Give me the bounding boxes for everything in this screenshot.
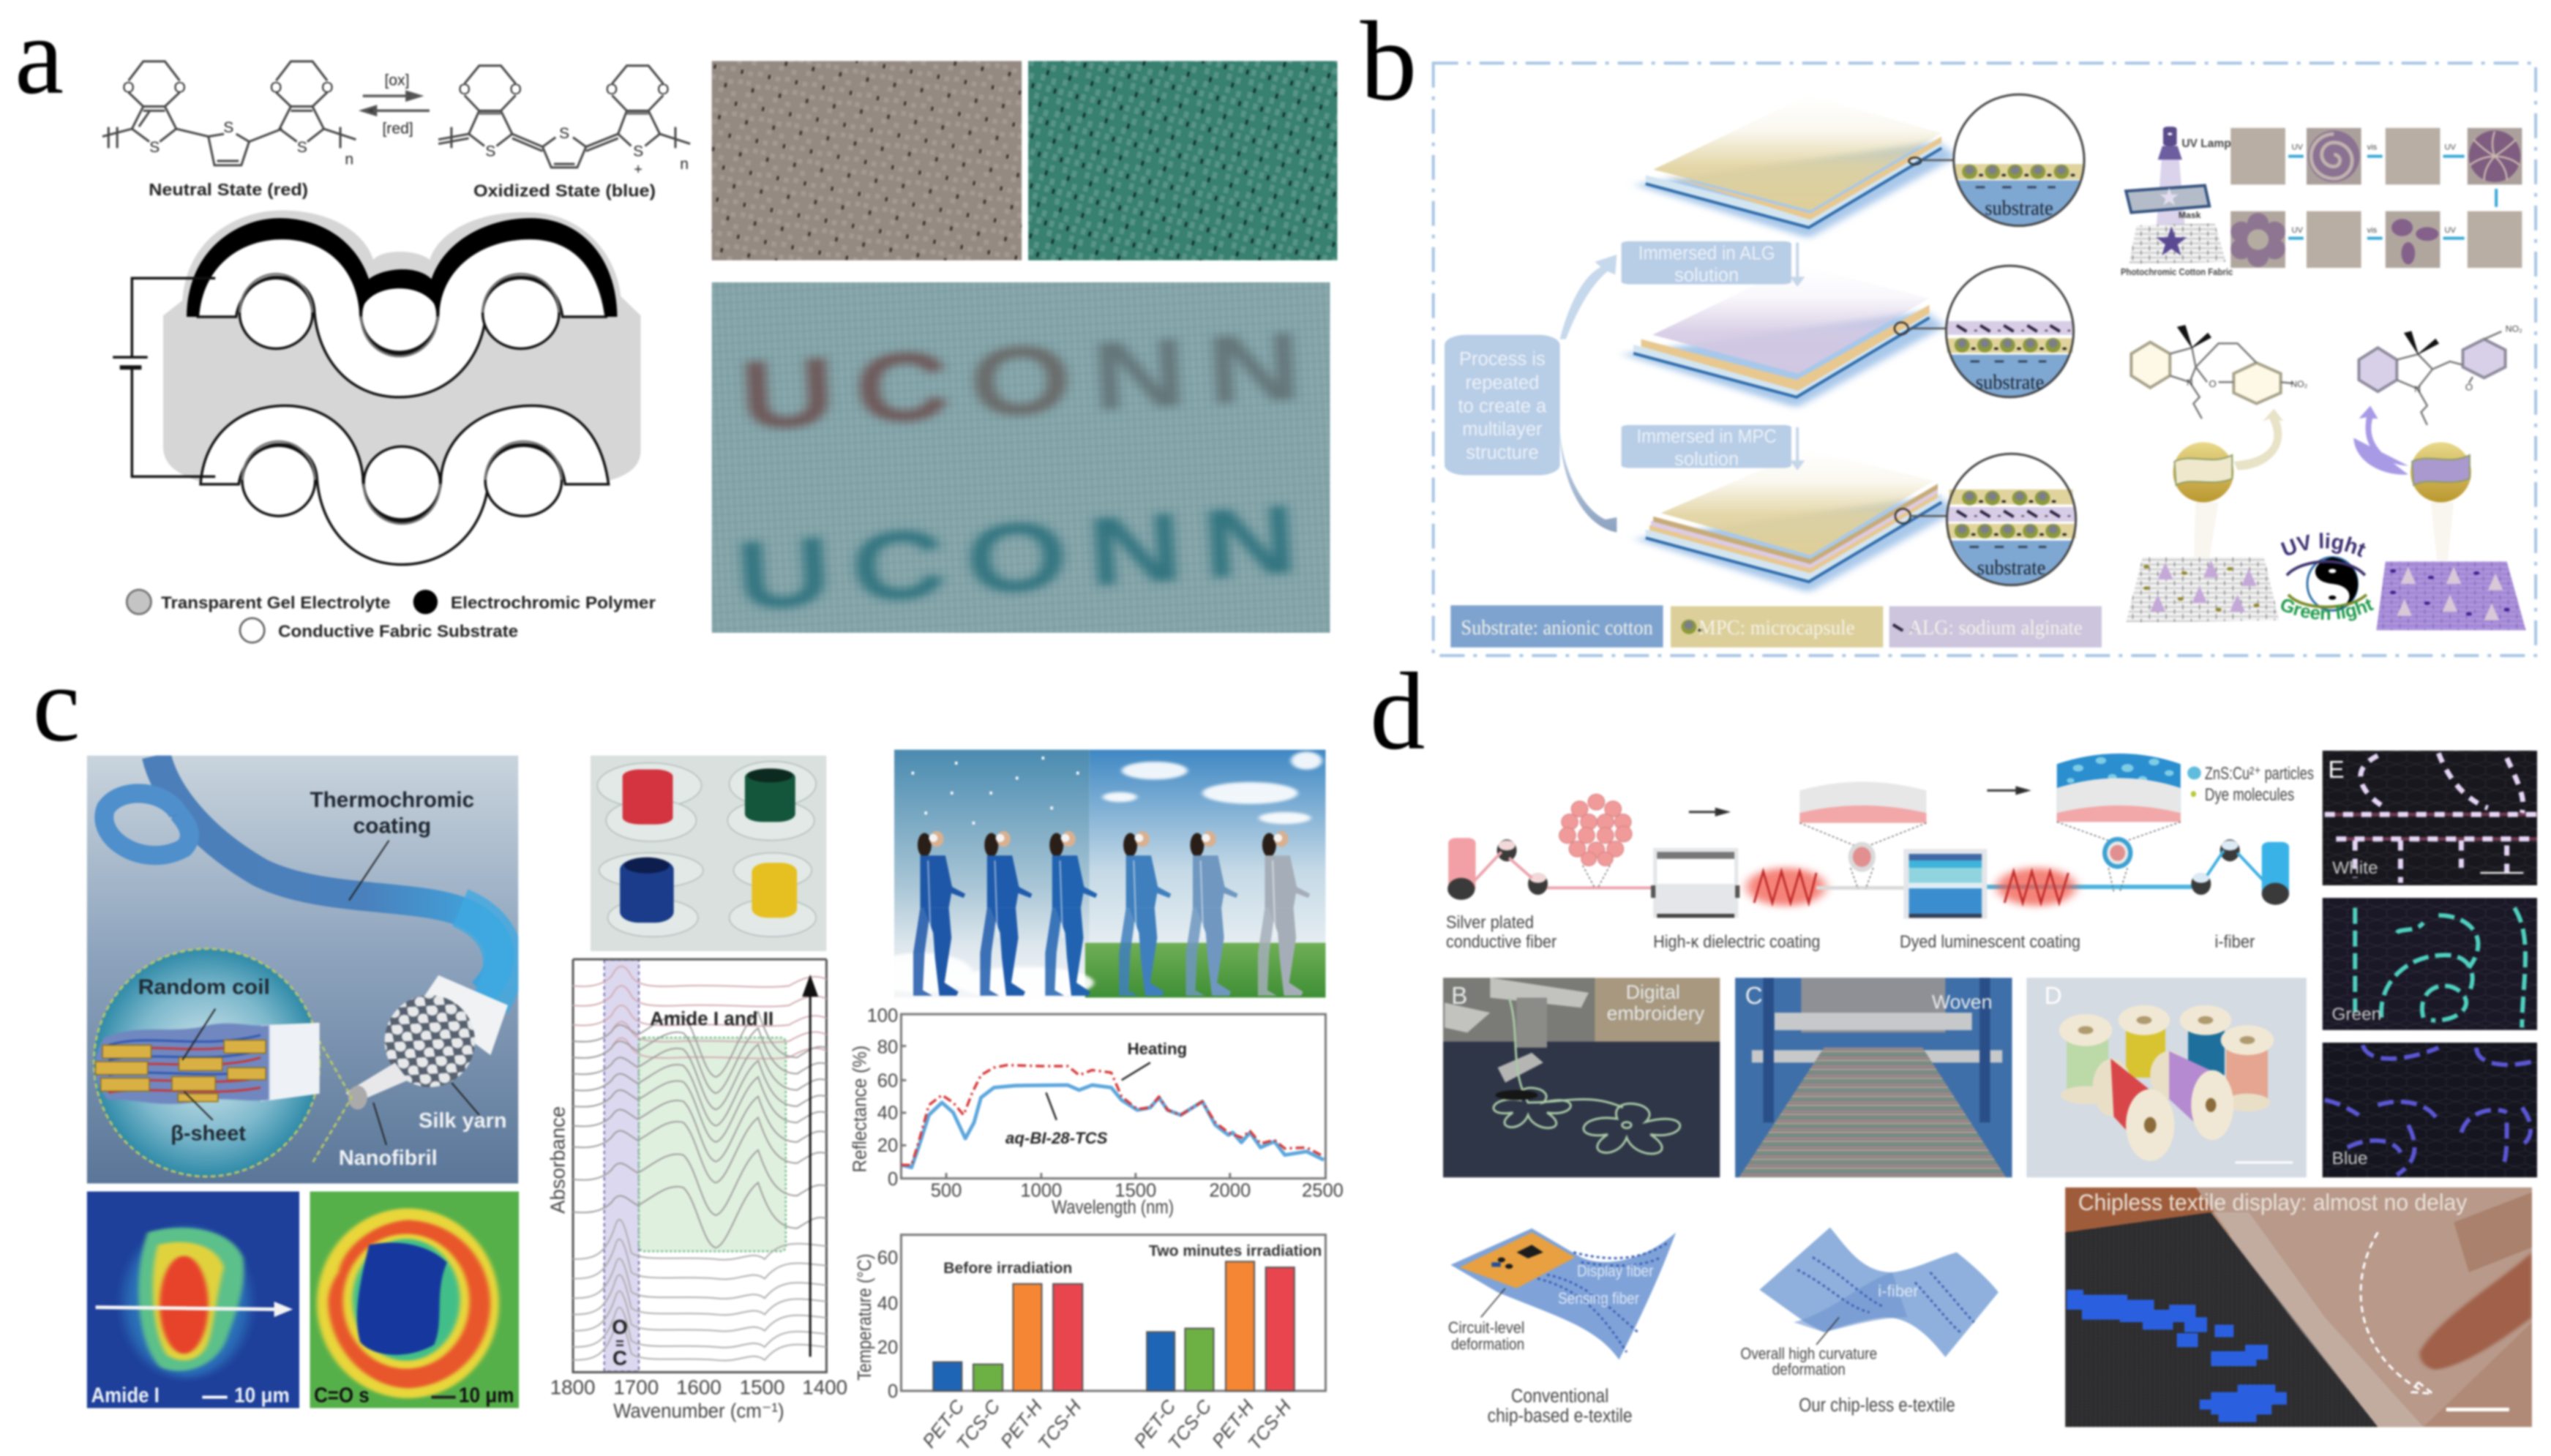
embedded fibers xyxy=(1532,1242,1668,1352)
state label oxidized: Oxidized State (blue) xyxy=(473,181,656,200)
process arrow 2 xyxy=(1987,787,2027,794)
gel electrolyte xyxy=(163,211,640,484)
capsule spheres and arrows xyxy=(2173,405,2471,560)
chemical structures of neutral and oxidized polymer: O xyxy=(173,80,186,97)
panel b: photochromic cotton fabric xyxy=(1358,0,2538,658)
photo labels: Blue xyxy=(2332,1149,2367,1168)
sample and molecule labels: N xyxy=(2414,384,2421,394)
sample and molecule labels: NO₂ xyxy=(2290,379,2308,389)
reflectance labels: 1000 xyxy=(1020,1180,1062,1201)
spectra traces xyxy=(573,967,826,1361)
chemical structures of neutral and oxidized polymer: n xyxy=(345,151,353,168)
reflectance labels: 100 xyxy=(867,1005,898,1026)
photo labels: E xyxy=(2328,757,2345,784)
FTIR spectra chart xyxy=(546,959,847,1422)
panel letter d: d xyxy=(1370,650,1426,773)
e-textile labels: chip-based e-textile xyxy=(1488,1406,1633,1426)
i-fiber labels: Silver plated xyxy=(1446,912,1534,932)
bar chart labels: TCS-H xyxy=(1244,1396,1296,1454)
reflectance line chart xyxy=(850,1005,1344,1218)
white sheath xyxy=(408,975,508,1055)
beta sheet blocks xyxy=(96,1040,266,1102)
chemical structures of neutral and oxidized polymer: O xyxy=(606,81,618,98)
chemical structures of neutral and oxidized polymer: O xyxy=(321,80,334,97)
process step boxes xyxy=(1445,241,1791,476)
dielectric coating tank xyxy=(1651,848,1739,917)
lens pointer lines xyxy=(312,1032,352,1163)
sample and molecule labels: UV xyxy=(2291,143,2303,152)
bar chart labels: 40 xyxy=(877,1294,898,1314)
bar chart labels xyxy=(855,1243,1322,1454)
repeat process label: structure xyxy=(1466,443,1539,463)
blue fabric sheet xyxy=(1450,1228,1676,1359)
sample and molecule labels: O xyxy=(2465,382,2473,393)
annotation arrows xyxy=(1046,1062,1150,1120)
merocyanine molecule open xyxy=(2359,331,2506,425)
FTIR labels: 1600 xyxy=(676,1376,722,1399)
coated fibre xyxy=(157,756,500,993)
bar chart labels: PET-H xyxy=(997,1396,1046,1452)
FTIR labels: Wavenumber (cm⁻¹) xyxy=(613,1400,784,1422)
panel letter b: b xyxy=(1360,0,1417,124)
map labels: 10 μm xyxy=(234,1384,290,1408)
bars after irradiation xyxy=(1147,1261,1295,1391)
step labels: Immersed in ALG xyxy=(1638,244,1775,264)
reversible light icon xyxy=(2287,558,2367,610)
bar chart labels: 0 xyxy=(888,1381,898,1402)
bar chart labels: PET-C xyxy=(919,1396,969,1452)
photo E: white emission xyxy=(2321,749,2539,887)
i-fiber labels: i-fiber xyxy=(2214,932,2255,952)
sample and molecule labels: vis xyxy=(2367,143,2378,152)
redox equilibrium arrows: [red] xyxy=(382,120,413,137)
red reflectance curve xyxy=(901,1065,1324,1165)
repeat process label xyxy=(1458,349,1547,463)
FTIR labels xyxy=(546,1009,847,1422)
fiber dashes xyxy=(1797,1257,1974,1332)
step arrows xyxy=(1793,243,1802,468)
blue wavy sheet xyxy=(1759,1228,1999,1357)
reflectance labels: Reflectance (%) xyxy=(850,1046,870,1172)
chip-less e-textile illustration xyxy=(1759,1228,1999,1357)
photo: coloured yarn spools xyxy=(590,755,827,952)
reflectance labels: Heating xyxy=(1128,1040,1187,1058)
photo B: digital embroidery xyxy=(1442,976,1721,1179)
chart frame and ticks xyxy=(901,1014,1325,1179)
chemical structures of neutral and oxidized polymer: n xyxy=(680,156,689,173)
legend xyxy=(127,590,656,642)
IR map: C=O stretching xyxy=(309,1190,520,1409)
reflectance labels: 0 xyxy=(888,1169,898,1190)
reflectance labels: 80 xyxy=(877,1037,898,1058)
chemical structures of neutral and oxidized polymer: O xyxy=(122,80,135,97)
bar chart labels: TCS-C xyxy=(1164,1396,1216,1454)
map labels: 10 μm xyxy=(459,1384,514,1408)
sample and molecule labels: UV xyxy=(2444,143,2456,152)
pink fibre path xyxy=(1475,852,1653,888)
silk yarn illustration xyxy=(86,754,520,1185)
leader line xyxy=(1481,1288,1505,1317)
sample and molecule labels: Photochromic Cotton Fabric xyxy=(2121,266,2233,277)
chemical structures of neutral and oxidized polymer: S xyxy=(485,143,495,160)
map labels: Amide I xyxy=(91,1384,160,1408)
protein strands xyxy=(95,1024,269,1104)
step labels xyxy=(1637,244,1777,470)
e-textile labels: Circuit-level xyxy=(1448,1318,1524,1337)
embroidered flowers xyxy=(1494,1088,1680,1154)
i-fiber labels: Dyed luminescent coating xyxy=(1900,932,2080,952)
chart frame xyxy=(573,959,826,1372)
reflectance labels: 20 xyxy=(877,1136,898,1156)
bar chart labels: TCS-H xyxy=(1034,1396,1086,1454)
photo: UCONN fabric display: UCONN xyxy=(737,310,1325,451)
bar chart labels: Before irradiation xyxy=(943,1260,1072,1277)
bar chart labels: PET-H xyxy=(1208,1396,1259,1452)
chemical structures of neutral and oxidized polymer: + xyxy=(634,162,643,178)
bar chart labels: 20 xyxy=(877,1337,898,1358)
progression arrow xyxy=(803,977,817,1356)
photo: red state fabric xyxy=(712,61,1022,260)
substrate labels xyxy=(1976,196,2053,579)
reflectance labels: 60 xyxy=(877,1070,898,1091)
repeat process label: repeated xyxy=(1465,372,1539,393)
photo: blue state fabric xyxy=(1028,61,1337,260)
reflectance labels: Wavelength (nm) xyxy=(1052,1198,1174,1218)
yarn labels: β-sheet xyxy=(171,1122,246,1146)
take-up spool xyxy=(2191,839,2289,905)
FTIR labels: = xyxy=(615,1336,624,1352)
yarn labels: coating xyxy=(353,814,431,838)
blue reflectance curve xyxy=(901,1085,1324,1168)
runners xyxy=(913,831,1310,996)
panel c: thermochromic textiles xyxy=(32,645,1344,1454)
photo: UCONN fabric display: UCONN xyxy=(733,483,1321,631)
photo samples xyxy=(2230,128,2522,268)
material legend markers xyxy=(2187,767,2201,797)
bottom fabric band xyxy=(201,405,609,565)
photo D: i-fiber spools xyxy=(2026,977,2307,1178)
yarn labels: Thermochromic xyxy=(310,788,474,812)
chemical structures of neutral and oxidized polymer: S xyxy=(559,125,569,142)
repeat process label: to create a xyxy=(1458,397,1547,417)
chemical structures of neutral and oxidized polymer: O xyxy=(657,81,670,98)
temperature bar chart xyxy=(855,1235,1325,1454)
swipe path xyxy=(2361,1232,2432,1394)
top fabric band xyxy=(198,239,606,397)
FTIR labels: 1400 xyxy=(802,1376,847,1399)
FTIR labels: 1800 xyxy=(550,1376,595,1399)
redox equilibrium arrows: [ox] xyxy=(384,72,409,89)
leader lines xyxy=(182,841,479,1145)
bar chart labels: 60 xyxy=(877,1248,898,1269)
panel d: electroluminescent textile display xyxy=(1370,650,2537,1427)
sample and molecule labels: vis xyxy=(2367,226,2378,235)
curved loop arrows xyxy=(1560,255,1617,533)
FTIR labels: Amide I and II xyxy=(650,1009,773,1029)
process arrow 1 xyxy=(1689,809,1727,815)
legend: Conductive Fabric Substrate xyxy=(278,621,518,640)
sample and molecule labels xyxy=(2121,138,2522,394)
stars on mask and fabric xyxy=(2156,188,2187,255)
reflectance labels: 2500 xyxy=(1302,1180,1344,1201)
sample and molecule labels: UV xyxy=(2291,226,2303,235)
circuit board xyxy=(1460,1232,1575,1288)
sample and molecule labels: Mask xyxy=(2179,210,2201,220)
bar chart frame xyxy=(901,1235,1325,1391)
photo: joggers changing colour xyxy=(893,748,1327,999)
cylinder end xyxy=(261,1023,320,1102)
chemical structures of neutral and oxidized polymer: S xyxy=(297,139,307,156)
chemical structures of neutral and oxidized polymer: O xyxy=(459,81,471,98)
photo labels: White xyxy=(2332,858,2378,878)
sheet 1: MPC layer xyxy=(1634,95,1957,239)
map labels xyxy=(91,1384,514,1408)
reflectance labels: 2000 xyxy=(1209,1180,1251,1201)
magnifier 2 xyxy=(1946,266,2074,398)
chemical structures of neutral and oxidized polymer: S xyxy=(223,119,233,136)
step labels: Immersed in MPC xyxy=(1637,427,1777,447)
substrate labels: substrate xyxy=(1985,196,2053,219)
reflectance labels: 40 xyxy=(877,1103,898,1124)
legend labels: MPC: microcapsule xyxy=(1698,616,1854,639)
FTIR labels: C xyxy=(613,1346,627,1369)
legend: Transparent Gel Electrolyte xyxy=(161,593,391,612)
legend labels: Substrate: anionic cotton xyxy=(1461,616,1653,639)
photochromic patterning: lamp, mask, fabric xyxy=(2126,127,2226,264)
e-textile labels: deformation xyxy=(1772,1360,1846,1378)
layer by layer schematic xyxy=(1445,94,2526,648)
coloured fabric xyxy=(2376,561,2526,630)
repeat process label: Process is xyxy=(1459,349,1546,369)
chemical structures of neutral and oxidized polymer: S xyxy=(149,139,160,156)
yarn labels xyxy=(138,788,507,1170)
sample and molecule labels: N xyxy=(2187,378,2193,388)
curing coil 1 xyxy=(1747,868,1826,906)
FTIR labels: 1500 xyxy=(740,1376,784,1399)
photo labels: embroidery xyxy=(1607,1002,1705,1024)
FTIR labels: 1700 xyxy=(613,1376,659,1399)
state labels: Neutral State (red) xyxy=(149,180,308,199)
photo labels: Woven xyxy=(1932,991,1992,1013)
photo E: blue emission xyxy=(2321,1041,2539,1179)
step labels: solution xyxy=(1674,266,1739,286)
reflectance labels: 500 xyxy=(931,1180,962,1201)
e-textile labels: Our chip-less e-textile xyxy=(1799,1395,1955,1416)
spiropyran molecule closed xyxy=(2131,326,2293,419)
sample and molecule labels: O xyxy=(2209,378,2217,389)
colourless fabric xyxy=(2126,558,2280,623)
step labels: solution xyxy=(1674,449,1739,470)
e-textile labels: Conventional xyxy=(1511,1386,1608,1407)
yarn labels: Silk yarn xyxy=(419,1109,507,1133)
panel letter c: c xyxy=(32,645,80,764)
photo labels: D xyxy=(2045,983,2062,1010)
conductive fiber bundle xyxy=(1559,794,1632,866)
inset lens xyxy=(94,949,320,1177)
map labels: C=O s xyxy=(314,1384,370,1408)
FTIR labels: O xyxy=(612,1316,628,1338)
electrochromic polymer layer xyxy=(187,218,617,317)
chemical structures of neutral and oxidized polymer: S xyxy=(633,143,643,160)
i-fiber labels: conductive fiber xyxy=(1446,932,1557,952)
substrate labels: substrate xyxy=(1976,370,2044,394)
e-textile labels: Display fiber xyxy=(1577,1261,1654,1280)
grey fibre xyxy=(1816,886,1903,890)
photo labels: Green xyxy=(2331,1005,2381,1024)
amide II region highlight xyxy=(639,1037,786,1251)
device schematic with woven fibers xyxy=(113,211,640,565)
scan arrow xyxy=(96,1305,288,1314)
yarn labels: Random coil xyxy=(138,976,270,999)
lit pixels xyxy=(2067,1290,2287,1422)
chipless display caption: Chipless textile display: almost no delay xyxy=(2078,1190,2468,1215)
i-fiber labels: Dye molecules xyxy=(2205,785,2294,805)
legend swatches xyxy=(1450,605,2102,648)
bars before irradiation xyxy=(933,1284,1082,1391)
photo labels: C xyxy=(1745,983,1763,1010)
bar chart labels: Temperature (°C) xyxy=(855,1254,875,1381)
darker crease xyxy=(1794,1272,1908,1332)
chemical structures of neutral and oxidized polymer: O xyxy=(510,81,522,98)
chips xyxy=(1491,1245,1543,1269)
photo C: woven fabric xyxy=(1734,976,2014,1179)
sheet 3: multilayer xyxy=(1634,449,1957,593)
reflectance labels xyxy=(850,1005,1344,1218)
magnifier 3 xyxy=(1947,454,2076,585)
e-textile labels: Overall high curvature xyxy=(1740,1345,1877,1363)
repeat process label: multilayer xyxy=(1462,419,1543,440)
i-fiber labels xyxy=(1446,764,2314,952)
i-fiber production line xyxy=(1447,754,2289,919)
green light arched label: Green light xyxy=(2280,598,2375,622)
leader line xyxy=(1816,1317,1839,1345)
panel a: electrochromic fabric xyxy=(15,0,1337,642)
curing coil 2 xyxy=(1997,868,2076,906)
e-textile labels: Sensing fiber xyxy=(1558,1289,1640,1307)
IR map: amide I xyxy=(85,1190,301,1409)
chemical structures of neutral and oxidized polymer xyxy=(102,61,690,178)
circuit wires and battery xyxy=(113,278,215,476)
photo E: green emission xyxy=(2321,896,2539,1032)
sample and molecule labels: NO₂ xyxy=(2506,324,2522,334)
sample and molecule labels: UV xyxy=(2444,226,2456,235)
reflectance labels: aq-BI-28-TCS xyxy=(1005,1129,1108,1147)
i-fiber labels: High-κ dielectric coating xyxy=(1653,932,1820,952)
amide I band highlight xyxy=(604,960,639,1371)
e-textile labels: deformation xyxy=(1451,1335,1524,1353)
bundle zoom lines xyxy=(1583,866,1610,888)
conventional chip-based e-textile illustration xyxy=(1450,1228,1676,1359)
sample and molecule labels: UV Lamp xyxy=(2181,138,2231,150)
redox equilibrium arrows xyxy=(363,72,430,137)
magnifier 1 xyxy=(1954,94,2084,226)
bar chart labels: Two minutes irradiation xyxy=(1149,1243,1322,1260)
bar chart labels: PET-C xyxy=(1131,1396,1180,1452)
FTIR labels: Absorbance xyxy=(546,1106,569,1214)
sheet 2: ALG layer xyxy=(1622,265,1945,408)
e-textile labels xyxy=(1448,1261,1955,1426)
substrate labels: substrate xyxy=(1977,556,2045,579)
legend: Electrochromic Polymer xyxy=(451,593,656,612)
photo labels: Digital xyxy=(1626,981,1680,1003)
luminescent magnifier xyxy=(2057,754,2181,892)
i-fiber labels: ZnS:Cu²⁺ particles xyxy=(2205,764,2314,784)
yarn labels: Nanofibril xyxy=(339,1147,438,1170)
dielectric magnifier xyxy=(1799,781,1926,889)
legend labels xyxy=(1461,616,2083,639)
luminescent coating tank xyxy=(1903,849,1987,919)
legend labels: ALG: sodium alginate xyxy=(1908,616,2083,639)
photo: UCONN fabric display xyxy=(711,281,1332,634)
photo: chipless textile display xyxy=(2064,1186,2533,1428)
blue fibre xyxy=(1987,885,2192,889)
e-textile labels: i-fiber xyxy=(1878,1282,1919,1300)
chemical structures of neutral and oxidized polymer: O xyxy=(270,80,282,97)
photo labels xyxy=(1451,757,2381,1168)
silk yarn bundle xyxy=(345,995,475,1110)
bar chart labels: TCS-C xyxy=(953,1396,1005,1454)
photo labels: B xyxy=(1451,983,1467,1010)
dashed frame xyxy=(1434,63,2536,656)
reflectance labels: 1500 xyxy=(1115,1180,1156,1201)
feed spool xyxy=(1447,838,1548,900)
UV light arched label: UV light xyxy=(2280,531,2367,558)
